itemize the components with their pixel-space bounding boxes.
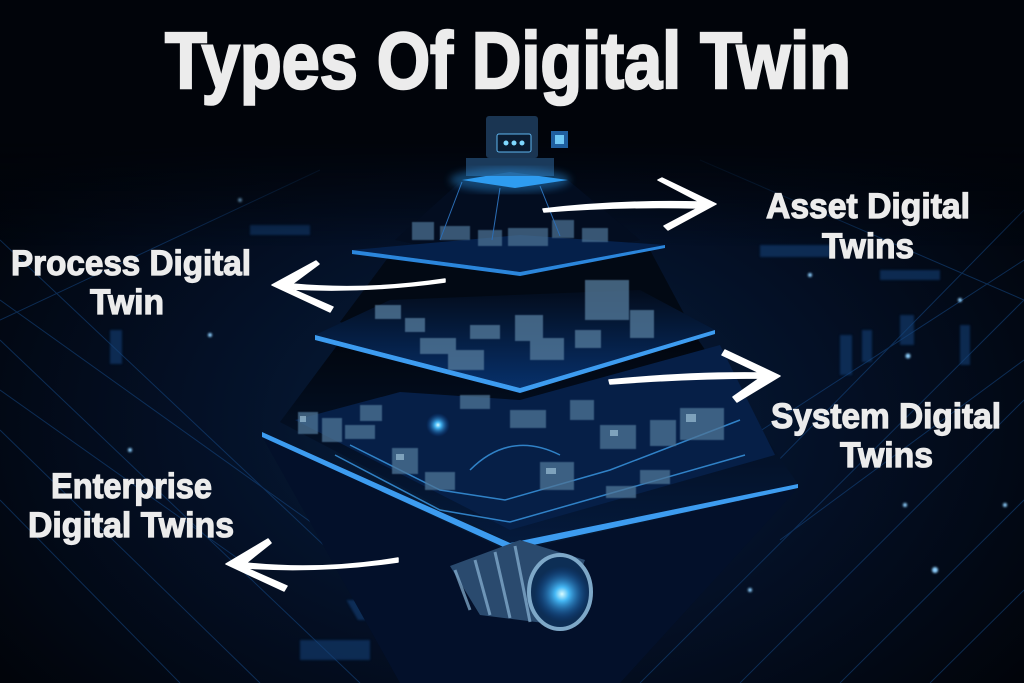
arrow: to System: [609, 350, 780, 402]
label: Asset Digital Twins: Twins: [822, 227, 914, 266]
label: Enterprise Digital Twins: Enterprise: [51, 467, 212, 506]
label: Enterprise Digital Twins: Digital Twins: [28, 506, 234, 545]
pyramid: [262, 116, 798, 683]
label: Process Digital Twin: Twin: [90, 283, 164, 322]
label: System Digital Twins: System Digital: [771, 397, 1001, 436]
label: System Digital Twins: [771, 397, 1001, 475]
tier: top level: [440, 172, 568, 240]
tier: third level: [315, 250, 715, 393]
label: Enterprise Digital Twins: [28, 467, 234, 545]
tier: second level: [352, 180, 665, 276]
turbine: [450, 540, 591, 629]
title: Types Of Digital Twin: [165, 16, 851, 105]
label: System Digital Twins: Twins: [840, 436, 933, 475]
tier: base platform: [262, 328, 798, 683]
arrow: to Asset: [543, 178, 716, 230]
label: Process Digital Twin: [11, 244, 251, 322]
arrow: to Enterprise: [226, 539, 398, 591]
label: Asset Digital Twins: [766, 187, 970, 266]
label: Process Digital Twin: Process Digital: [11, 244, 251, 283]
apex device: [466, 116, 568, 176]
label: Asset Digital Twins: Asset Digital: [766, 187, 970, 226]
arrow: to Process: [272, 261, 445, 312]
